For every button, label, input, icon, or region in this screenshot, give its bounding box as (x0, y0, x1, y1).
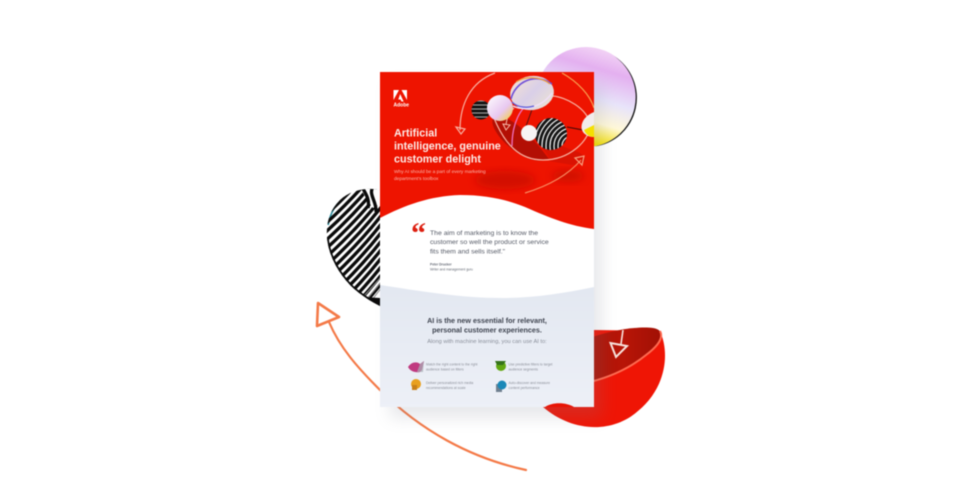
artwork: zebra sphere (534, 117, 568, 151)
title: Artificial (394, 128, 437, 140)
item: discover (496, 380, 550, 392)
logo: Adobe: Adobe (394, 102, 409, 108)
item: personalized: recommendations at scale (426, 386, 466, 390)
title: customer delight (394, 154, 481, 166)
heading: AI essential: personal customer experiences. (432, 325, 542, 334)
subheading: Along with machine learning, you can use AI to: (427, 339, 547, 345)
bowl arrowhead (610, 343, 627, 357)
artwork: striped sphere small (470, 100, 492, 120)
quote text: The aim of marketing is to know the (430, 230, 538, 237)
artwork: pale bubble (487, 95, 513, 121)
quote attribution: Peter Drucker (430, 262, 452, 266)
item: predictive: audience segments (508, 368, 538, 372)
heading: AI essential: AI is the new essential for relevant, (427, 316, 547, 325)
card shadow (390, 84, 602, 418)
infographic canvas (315, 46, 666, 472)
item: discover: content performance (508, 386, 540, 390)
artwork: white sphere (521, 125, 537, 141)
disc behind card (536, 47, 637, 147)
orange arrow (317, 303, 526, 470)
report card (380, 72, 614, 407)
heading: AI essential (427, 316, 547, 334)
item: discover: Auto-discover and measure (508, 381, 550, 385)
artwork: disc edge on card (582, 112, 594, 137)
item: predictive: Use predictive filters to target (508, 362, 552, 366)
zebra heart shape (326, 188, 381, 307)
artwork: hole and rings (456, 73, 594, 193)
panel: red cover (380, 72, 614, 229)
item: personalized (411, 379, 473, 390)
subtitle: Why AI should be a part of every marketing (394, 169, 486, 175)
title (394, 128, 501, 166)
red bowl (543, 328, 665, 427)
quote text: customer so well the product or service (430, 239, 549, 246)
quote attribution (430, 262, 473, 272)
artwork: glass sphere (509, 75, 555, 111)
quote mark: “ (411, 217, 426, 250)
quote text: fits them and sells itself." (430, 248, 506, 256)
panel: lower section (380, 285, 594, 407)
subtitle (394, 169, 486, 182)
item: right content: audience based on filters (426, 368, 464, 372)
item: predictive (495, 361, 552, 372)
logo: Adobe (394, 90, 409, 108)
quote attribution: Writer and management guru (430, 268, 473, 272)
item: right content (408, 361, 478, 372)
quote text (430, 230, 549, 256)
item: personalized: Deliver personalized rich media (426, 381, 473, 385)
subtitle: department's toolbox (394, 176, 439, 182)
item: right content: Match the right content to the right (426, 362, 478, 366)
title: intelligence, genuine (394, 140, 501, 152)
